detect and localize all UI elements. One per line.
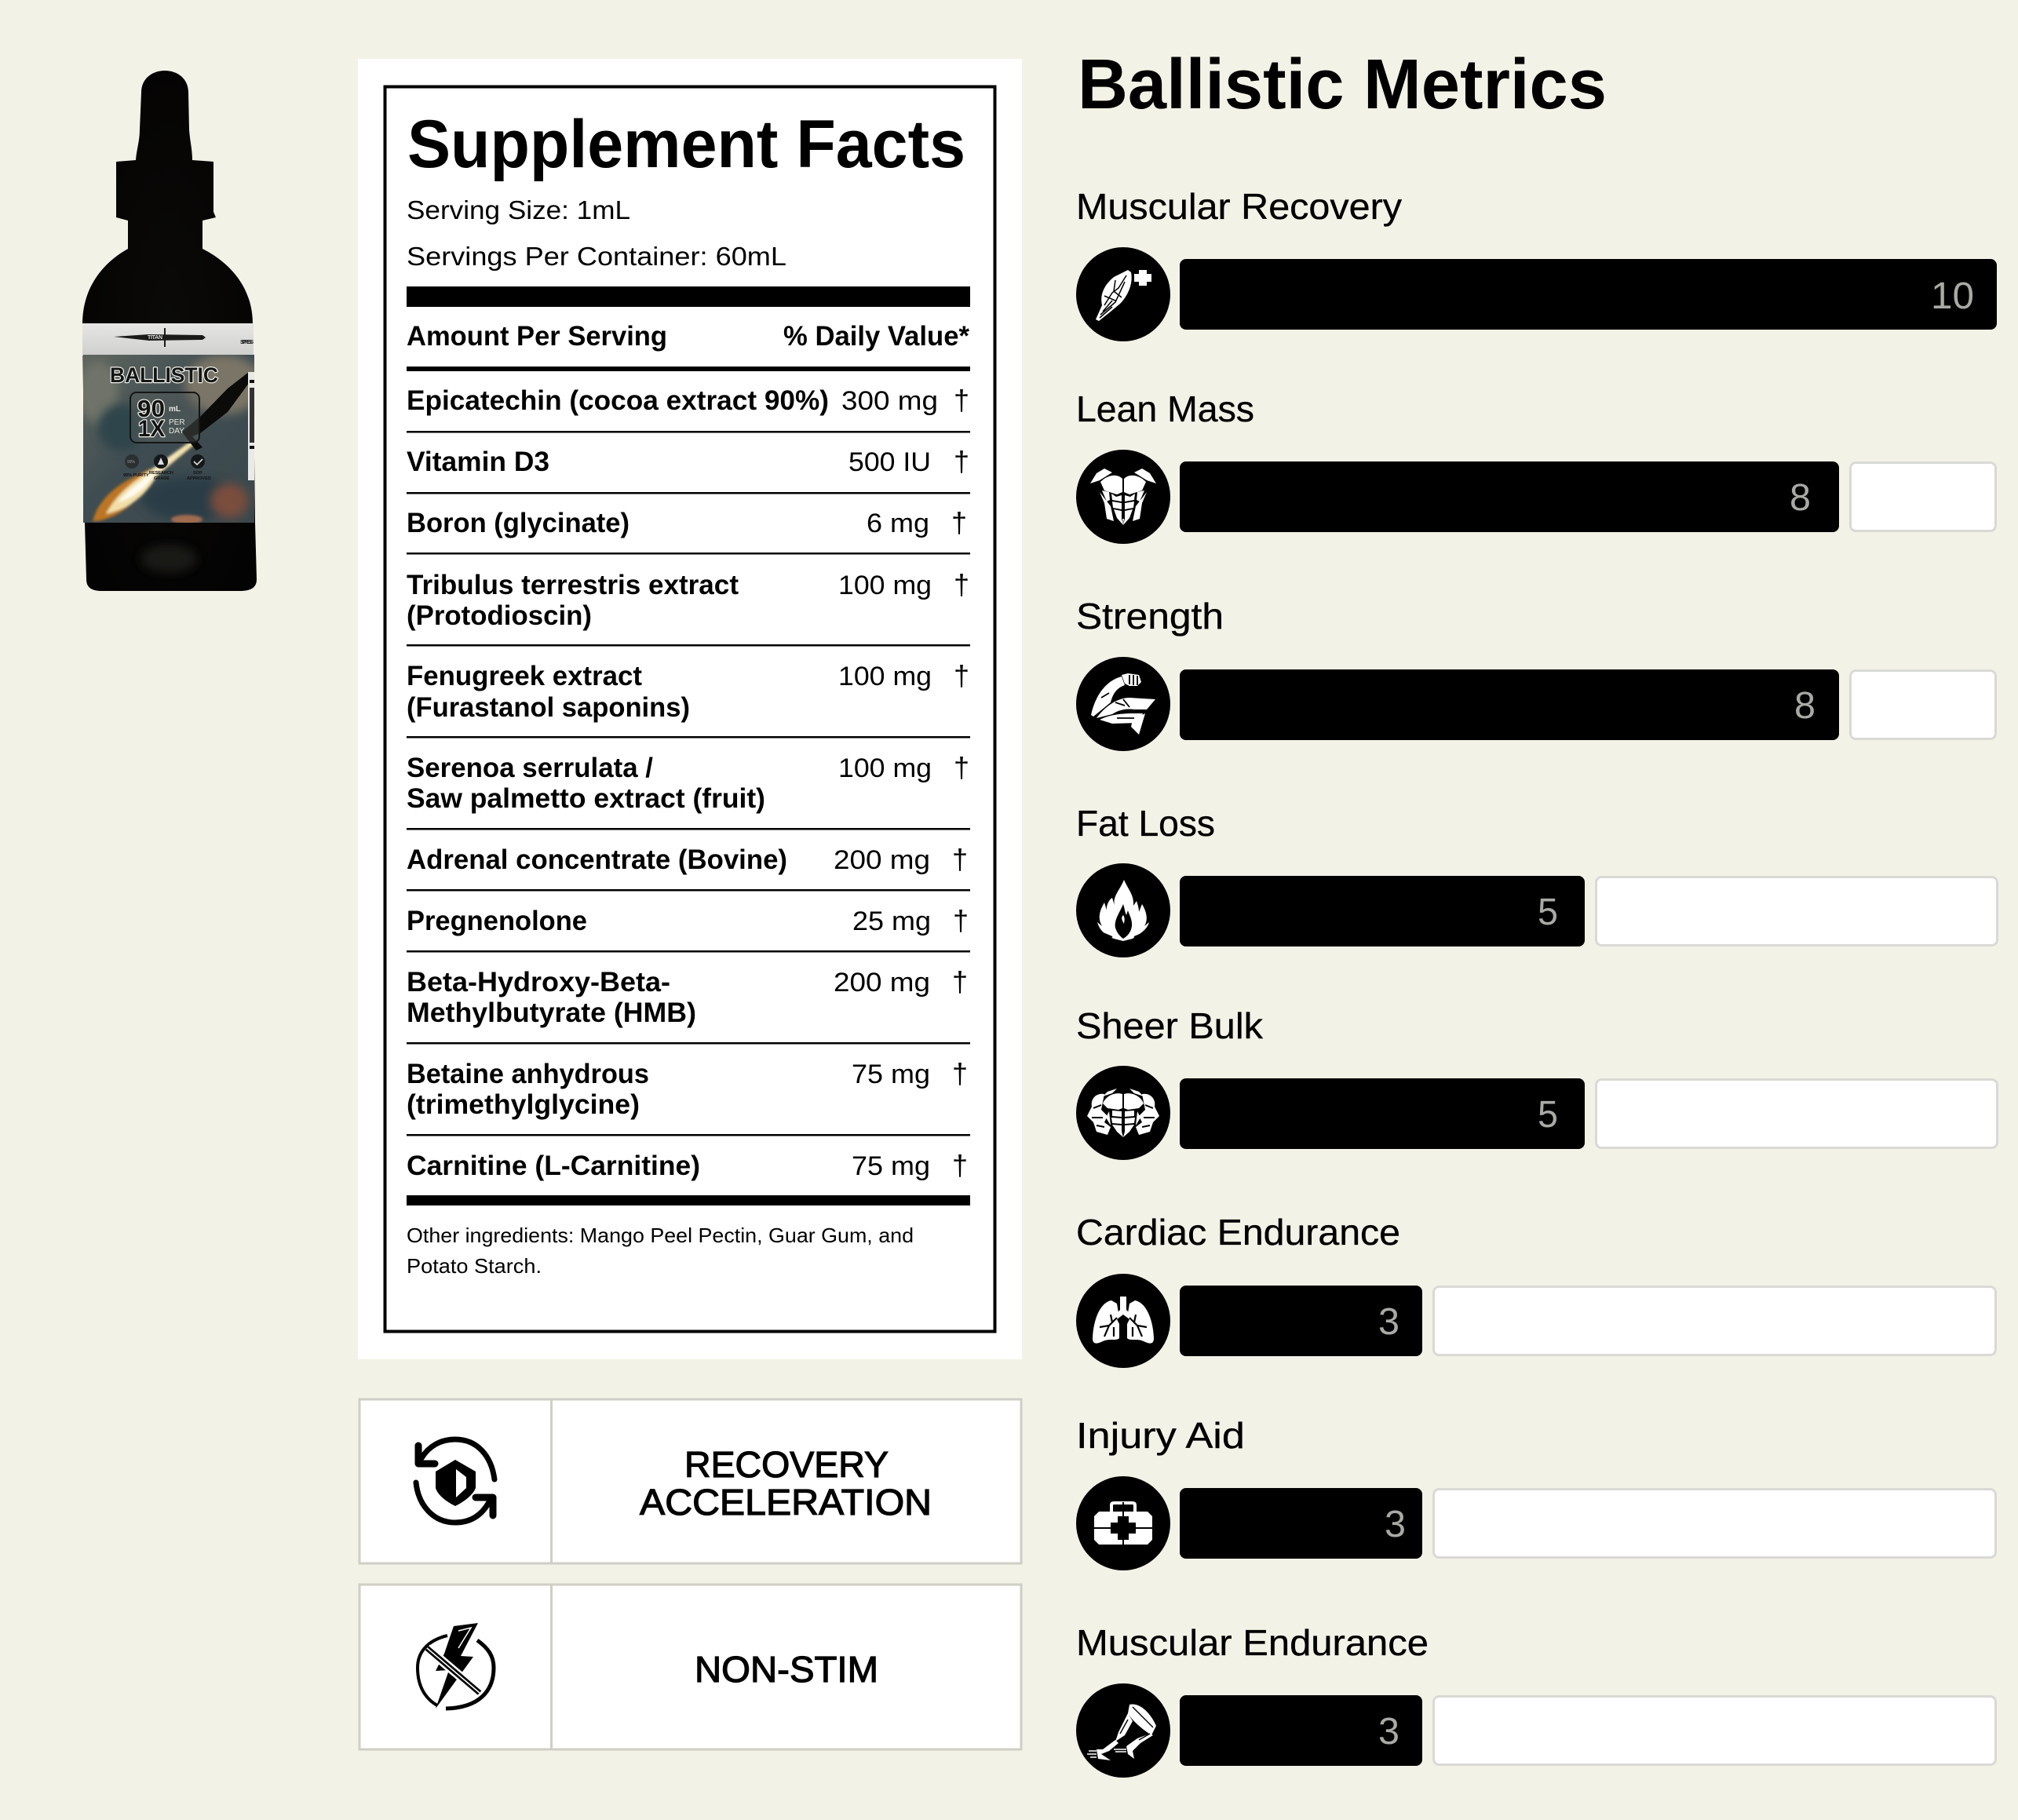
other ingredients note: Other ingredients: Mango Peel Pectin, Guar Gum, and: [407, 1224, 914, 1247]
other ingredients note: [407, 1224, 914, 1278]
row: serenoa: 100 mg: [838, 753, 932, 783]
row: epicatechin: Epicatechin (cocoa extract 90%): [407, 385, 829, 416]
row: fenugreek: †: [954, 659, 969, 691]
row: adrenal: [407, 843, 968, 875]
row: hmb: †: [952, 965, 968, 998]
row: epicatechin: †: [954, 384, 969, 416]
row: pregnenolone: 25 mg: [852, 906, 931, 936]
servings per container: Servings Per Container: 60mL: [407, 242, 786, 271]
dosage box: mL: [169, 405, 181, 414]
small badges: 99% PURITY: [123, 473, 149, 478]
metric: muscular recovery: Muscular Recovery: [1076, 186, 1402, 227]
icon: flexed arm: [1076, 657, 1170, 751]
row: pregnenolone: [407, 904, 969, 936]
row: tribulus: (Protodioscin): [407, 600, 592, 631]
metric: sheer bulk: [1076, 1005, 1997, 1160]
panel: supplement facts: [358, 59, 1022, 1359]
heading: ballistic metrics: Ballistic Metrics: [1078, 46, 1607, 124]
row: hmb: [407, 965, 968, 1028]
dosage box: 90: [137, 395, 165, 422]
badge label: NON-STIM: [695, 1649, 878, 1690]
row: serenoa: [407, 751, 969, 814]
small badges: [123, 454, 211, 481]
badge: recovery acceleration: [359, 1399, 1021, 1563]
product bottle: [78, 71, 263, 591]
icon: first aid kit: [1076, 1476, 1170, 1570]
dosage box: 1X: [138, 416, 165, 442]
row: boron: [407, 506, 967, 538]
row: hmb: 200 mg: [834, 968, 930, 998]
metric: injury aid: [1076, 1415, 1995, 1570]
row: fenugreek: [407, 659, 969, 723]
metric: sheer bulk: 5: [1538, 1094, 1558, 1136]
metric: cardiac endurance: 3: [1378, 1301, 1399, 1343]
side nutrition panel: [248, 372, 254, 480]
row: carnitine: [407, 1149, 968, 1181]
metric: muscular endurance: Muscular Endurance: [1076, 1622, 1429, 1663]
small badges: GRADE: [154, 476, 170, 481]
metric: lean mass: 8: [1790, 477, 1811, 519]
dropper and bottle silhouette: [82, 71, 257, 591]
row: betaine: Betaine anhydrous: [407, 1059, 649, 1089]
row: boron: Boron (glycinate): [407, 508, 629, 538]
badge: non-stim: [359, 1585, 1021, 1749]
metric: strength: 8: [1794, 685, 1815, 727]
badge label: [640, 1444, 932, 1523]
supplement facts title: Supplement Facts: [407, 107, 965, 182]
metric: strength: [1076, 596, 1995, 751]
row: serenoa: †: [954, 751, 969, 783]
row: serenoa: Serenoa serrulata /: [407, 753, 653, 783]
row: tribulus: †: [954, 568, 969, 600]
metric: fat loss: 5: [1538, 892, 1558, 933]
dagger logo: [114, 334, 206, 341]
small badges: SOP: [193, 471, 203, 476]
icon: bulky torso: [1076, 1066, 1170, 1160]
serving size: Serving Size: 1mL: [407, 195, 630, 224]
small badges: APPROVED: [187, 476, 211, 481]
column heading: daily value: % Daily Value*: [783, 321, 969, 352]
metric: injury aid: Injury Aid: [1076, 1415, 1245, 1456]
row: adrenal: †: [952, 843, 968, 875]
metric: cardiac endurance: [1076, 1212, 1995, 1368]
row: betaine: 75 mg: [852, 1060, 930, 1089]
label white band: SP.PRESS: [240, 340, 254, 345]
neck highlight: [157, 235, 170, 236]
row: fenugreek: (Furastanol saponins): [407, 692, 690, 723]
metric: lean mass: Lean Mass: [1076, 388, 1254, 429]
icon: crossed lightning: [418, 1623, 494, 1709]
row: hmb: Methylbutyrate (HMB): [407, 998, 696, 1028]
row: vitamin d3: 500 IU: [848, 447, 931, 477]
metric: sheer bulk: Sheer Bulk: [1076, 1005, 1264, 1046]
metric: strength: Strength: [1076, 596, 1224, 636]
row: fenugreek: Fenugreek extract: [407, 661, 642, 691]
row: adrenal: 200 mg: [834, 845, 930, 875]
row: boron: †: [951, 506, 967, 538]
row: betaine: [407, 1057, 968, 1120]
row: tribulus: 100 mg: [838, 571, 932, 600]
row: betaine: (trimethylglycine): [407, 1089, 640, 1120]
icon: running legs: [1076, 1683, 1170, 1778]
metric: muscular endurance: 3: [1378, 1711, 1399, 1753]
knife: [182, 372, 254, 450]
row: tribulus: [407, 568, 969, 631]
icon: flame: [1076, 863, 1170, 957]
icon: torso: [1076, 450, 1170, 544]
row: betaine: †: [952, 1057, 968, 1089]
thick rule top: [407, 286, 970, 307]
product name: BALLISTIC: [110, 363, 218, 387]
icon: lungs: [1076, 1274, 1170, 1368]
label artwork: [78, 355, 263, 524]
forearm: [1091, 677, 1125, 717]
metric: muscular recovery: [1076, 186, 1997, 341]
small badges: RESEARCH: [149, 471, 173, 476]
dosage box: DAY: [169, 427, 184, 436]
row: vitamin d3: Vitamin D3: [407, 447, 549, 477]
row: boron: 6 mg: [867, 509, 929, 538]
row: carnitine: Carnitine (L-Carnitine): [407, 1151, 700, 1181]
icon: recovery shield: [416, 1439, 494, 1523]
row: epicatechin: 300 mg: [841, 386, 938, 416]
metric: fat loss: Fat Loss: [1076, 803, 1215, 844]
dosage box: PER: [169, 418, 185, 427]
other ingredients note: Potato Starch.: [407, 1254, 542, 1278]
row: carnitine: †: [952, 1149, 968, 1181]
label white band: [82, 323, 254, 356]
icon: muscle with plus: [1076, 247, 1170, 341]
label white band: TITAN: [148, 335, 162, 341]
metric: muscular recovery: 10: [1931, 275, 1974, 317]
metric: injury aid: 3: [1385, 1504, 1406, 1545]
heading rule: [407, 367, 970, 371]
badge label: ACCELERATION: [640, 1482, 932, 1523]
row: pregnenolone: †: [953, 904, 969, 936]
row: pregnenolone: Pregnenolone: [407, 906, 587, 936]
row: serenoa: Saw palmetto extract (fruit): [407, 783, 765, 814]
row: vitamin d3: †: [954, 445, 969, 477]
row: hmb: Beta-Hydroxy-Beta-: [407, 967, 670, 998]
metric: fat loss: [1076, 803, 1997, 957]
rocket flame: [93, 441, 195, 521]
metric: lean mass: [1076, 388, 1995, 544]
base highlight: [140, 545, 197, 573]
column heading: amount: Amount Per Serving: [407, 321, 667, 352]
small badges: 99%: [127, 460, 136, 465]
row: fenugreek: 100 mg: [838, 662, 932, 691]
row: tribulus: Tribulus terrestris extract: [407, 570, 739, 600]
row: carnitine: 75 mg: [852, 1151, 930, 1181]
badge label: RECOVERY: [684, 1444, 889, 1485]
metric: muscular endurance: [1076, 1622, 1995, 1778]
row: adrenal: Adrenal concentrate (Bovine): [407, 844, 787, 875]
row: vitamin d3: [407, 445, 969, 477]
thick rule bottom: [407, 1195, 970, 1205]
dosage box: [130, 392, 199, 443]
metric: cardiac endurance: Cardiac Endurance: [1076, 1212, 1400, 1253]
facts frame: [385, 86, 995, 1331]
